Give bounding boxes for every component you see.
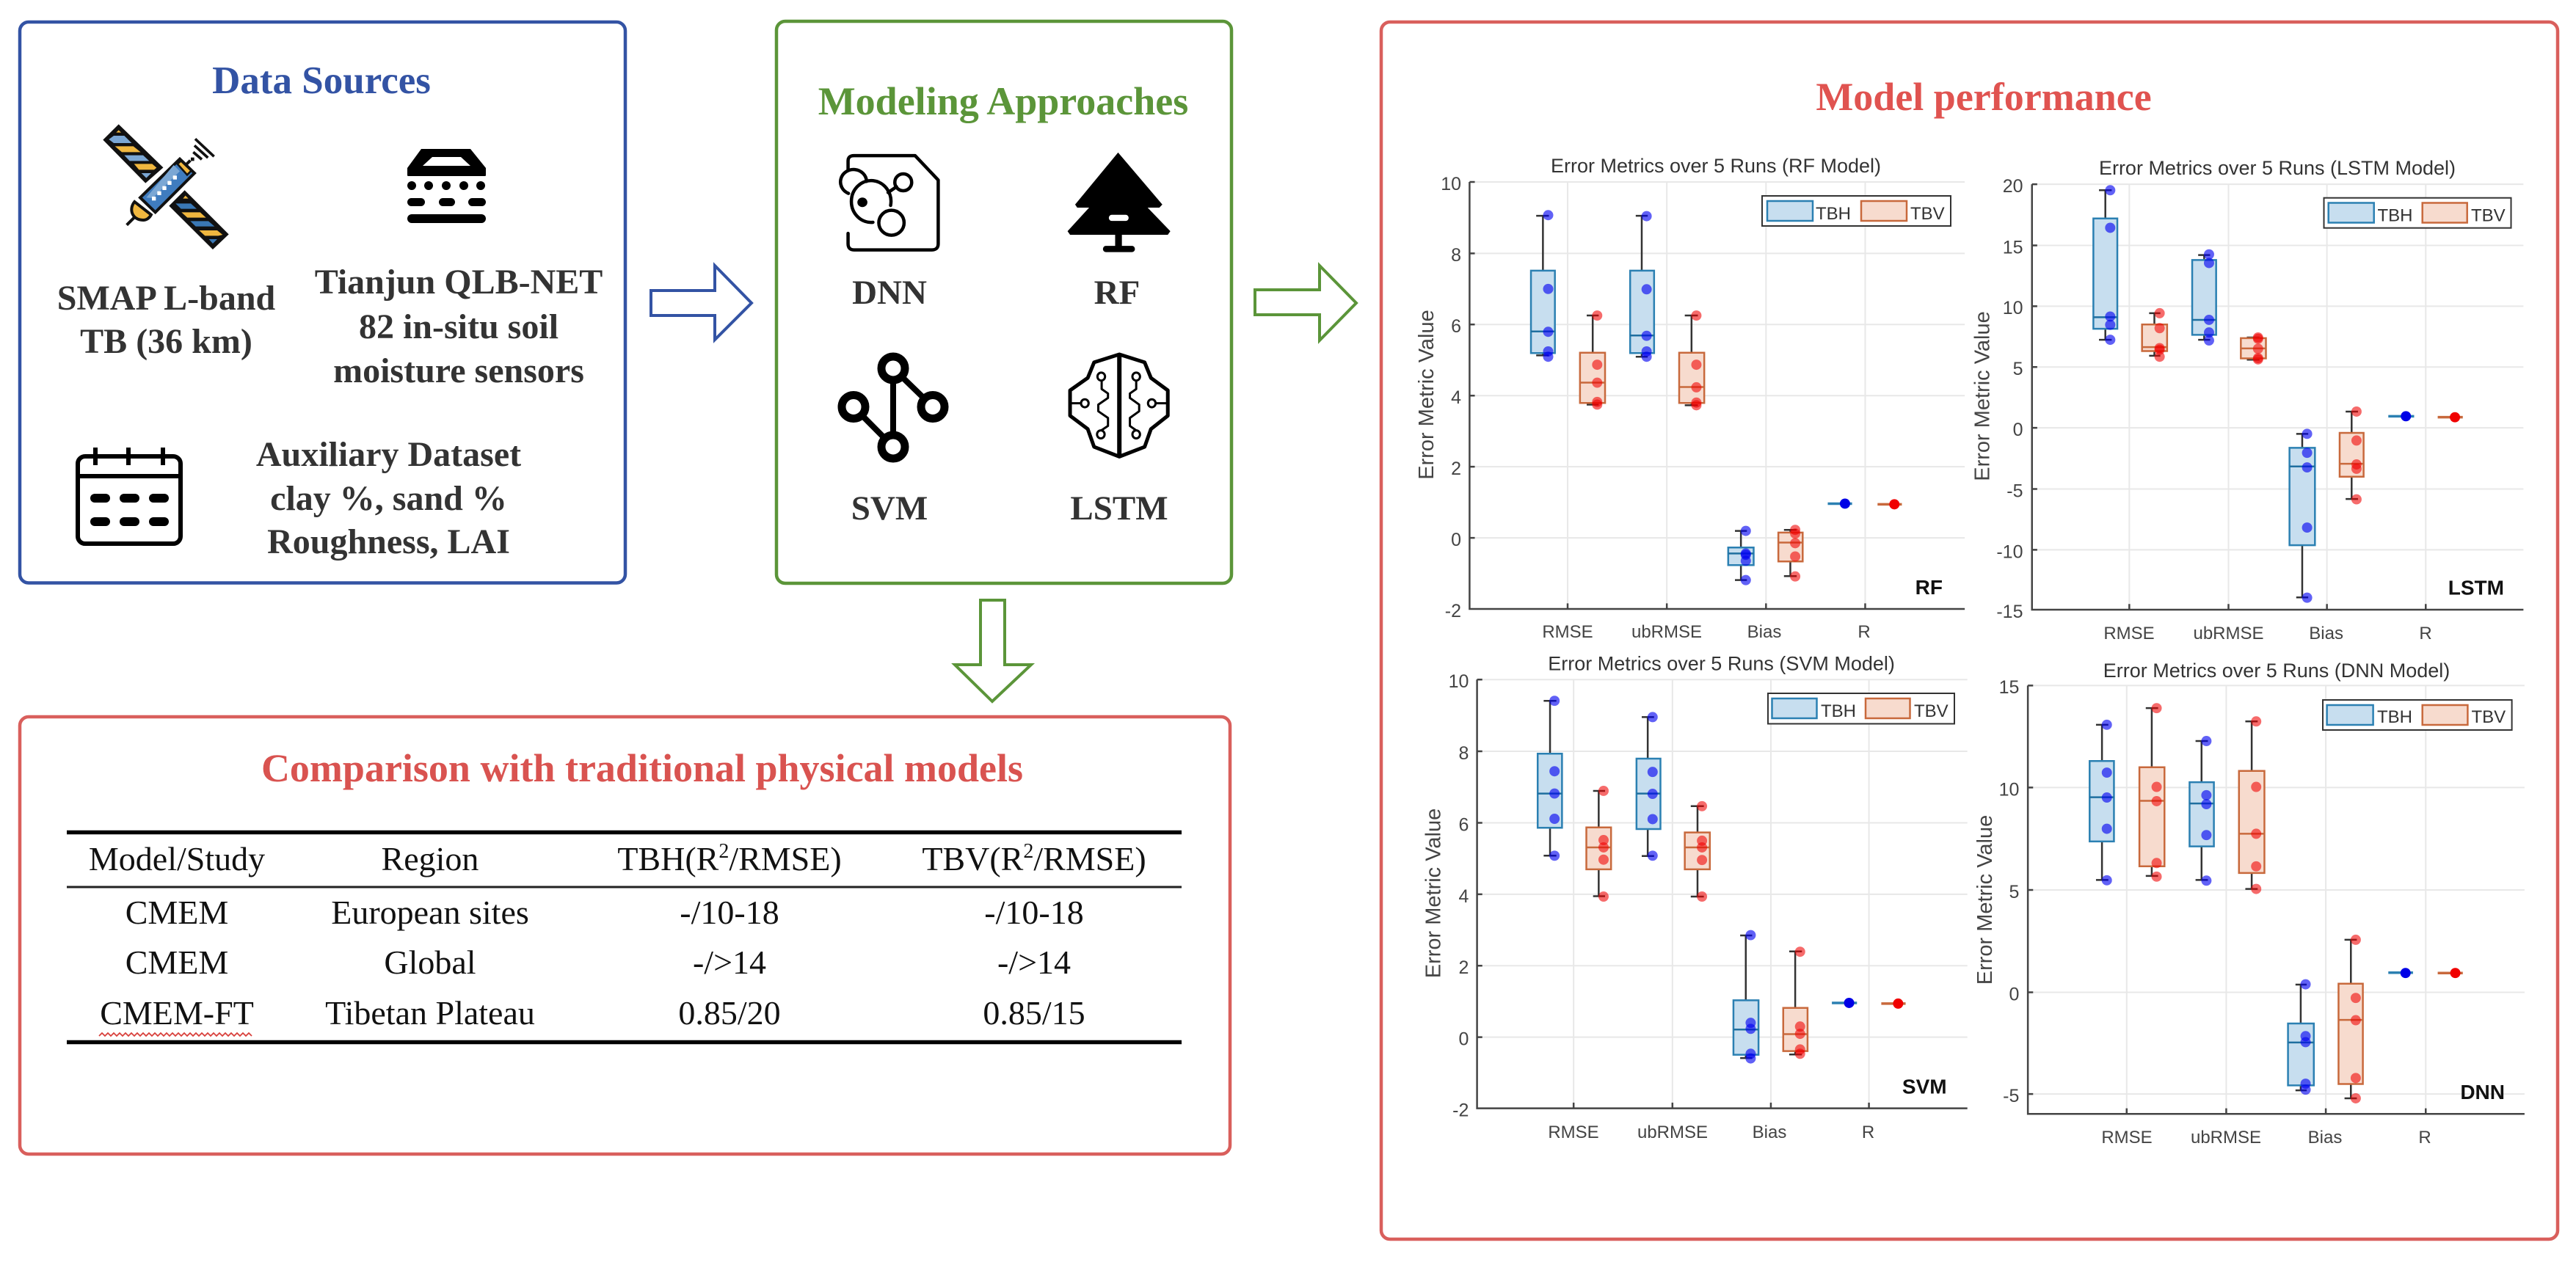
box: RMSE TBH — [1531, 210, 1555, 362]
y-axis tick labels: -15 — [1996, 602, 2023, 622]
y-axis tick labels: -2 — [1452, 1101, 1469, 1121]
legend — [2324, 198, 2511, 228]
y-axis tick labels: 0 — [1451, 530, 1461, 550]
y-axis tick labels: -5 — [2006, 481, 2023, 502]
box: Bias TBH — [2288, 979, 2314, 1095]
plot area: axes, grid and boxes — [2028, 685, 2525, 1114]
table header: 2 — [718, 840, 729, 863]
box: Bias TBV — [2338, 935, 2363, 1103]
table header: TBH(R — [617, 840, 718, 877]
chart: SVM model — [1422, 653, 1968, 1142]
y-axis tick labels: 2 — [1458, 957, 1469, 978]
icon: calendar — [78, 448, 181, 544]
box: RMSE TBV — [2142, 308, 2167, 362]
table row: CMEM European sites — [125, 894, 1084, 931]
plot area: axes, grid and boxes — [1469, 182, 1965, 609]
table row: CMEM-FT Tibetan Plateau: Tibetan Plateau — [325, 994, 535, 1032]
text: SMAP L-band: SMAP L-band — [57, 279, 276, 318]
x-axis category labels — [1542, 622, 1871, 642]
y-axis tick labels — [1449, 671, 1469, 1121]
table row: CMEM Global: Global — [384, 944, 476, 981]
text: SMAP L-band: TB (36 km) — [80, 322, 252, 361]
legend: TBH — [1816, 204, 1851, 224]
y-axis label: Error Metric Value — [1971, 311, 1995, 481]
legend — [2323, 700, 2512, 730]
table row: CMEM Global: CMEM — [125, 944, 228, 981]
table row: CMEM European sites: CMEM — [125, 894, 228, 931]
icon: satellite — [105, 126, 227, 248]
chart: RF model — [1415, 155, 1965, 642]
y-axis tick labels: 4 — [1458, 886, 1469, 907]
table row: CMEM European sites: European sites — [331, 894, 529, 931]
x-axis category labels: RMSE — [1548, 1123, 1599, 1142]
legend: TBV — [1910, 204, 1945, 224]
y-axis tick labels: 15 — [1999, 677, 2019, 698]
x-axis category labels: R — [2419, 624, 2432, 643]
y-axis tick labels — [1999, 677, 2019, 1106]
box: RMSE TBV — [2139, 703, 2164, 882]
x-axis category labels: Bias — [1747, 622, 1781, 642]
model tag: DNN: DNN — [2460, 1081, 2505, 1103]
model tag: LSTM: LSTM — [2448, 577, 2504, 599]
heading: data sources: Data Sources — [212, 59, 431, 102]
panel border — [20, 22, 625, 583]
legend: TBH — [1821, 701, 1856, 721]
box: ubRMSE TBH — [2189, 736, 2214, 886]
x-axis category labels: Bias — [2308, 1128, 2342, 1147]
text: SVM: SVM — [851, 489, 928, 528]
y-axis tick labels: 10 — [1999, 779, 2019, 800]
y-axis label: Error Metric Value — [1415, 310, 1438, 480]
box: Bias TBV — [1778, 525, 1802, 582]
box: R TBH — [2388, 968, 2413, 978]
table header: 2 — [1023, 840, 1033, 863]
plot area: axes, grid and boxes — [1477, 679, 1968, 1109]
y-axis tick labels: 0 — [1458, 1029, 1469, 1050]
box: RMSE TBH — [1538, 696, 1562, 861]
x-axis category labels: R — [2418, 1128, 2431, 1147]
x-axis category labels — [1548, 1123, 1874, 1142]
y-axis tick labels: 10 — [1441, 174, 1461, 194]
chart title: Error Metrics over 5 Runs (SVM Model) — [1548, 653, 1895, 675]
chart: DNN model — [1973, 660, 2525, 1147]
icon: DNN — [840, 156, 938, 250]
y-axis label: Error Metric Value — [1973, 815, 1997, 985]
table row: CMEM-FT Tibetan Plateau — [100, 994, 1085, 1032]
table header: /RMSE) — [1033, 840, 1146, 877]
y-axis tick labels — [1996, 176, 2023, 622]
text: DNN: DNN — [852, 274, 927, 312]
heading: model performance: Model performance — [1816, 75, 2152, 119]
chart title: Error Metrics over 5 Runs (RF Model) — [1551, 155, 1881, 177]
chart: LSTM model — [1971, 157, 2523, 643]
table row: CMEM Global: -/>14 — [693, 944, 766, 981]
arrow: data sources to modeling approaches — [651, 266, 752, 340]
x-axis category labels: ubRMSE — [1631, 622, 1702, 642]
y-axis tick labels: 5 — [2013, 359, 2023, 379]
table: comparison values — [67, 832, 1182, 1042]
box: R TBV — [2438, 968, 2463, 978]
table row: CMEM Global — [125, 944, 1071, 981]
legend: TBV — [1914, 701, 1949, 721]
x-axis category labels: RMSE — [2103, 624, 2155, 643]
panel: model performance — [1381, 22, 2558, 1239]
y-axis tick labels: 8 — [1451, 245, 1461, 266]
box: RMSE TBH — [2093, 185, 2117, 345]
heading: comparison: Comparison with traditional physical models — [261, 746, 1023, 790]
text: RF: RF — [1094, 274, 1140, 312]
legend — [1768, 693, 1954, 723]
icon: SVM graph — [842, 357, 945, 459]
table header: Model/Study — [89, 840, 265, 877]
box: RMSE TBV — [1580, 310, 1605, 409]
table row: CMEM European sites: -/10-18 — [984, 894, 1084, 931]
text: Tianjun QLB-NET: Tianjun QLB-NET — [315, 263, 603, 302]
y-axis tick labels: -10 — [1996, 541, 2023, 562]
panel border — [20, 717, 1230, 1154]
y-axis tick labels: 10 — [2003, 298, 2023, 318]
text: LSTM: LSTM — [1070, 489, 1168, 528]
box: Bias TBH — [1733, 930, 1758, 1064]
plot area: axes, grid and boxes — [2032, 184, 2523, 610]
box: R TBH — [1827, 498, 1852, 508]
y-axis tick labels: -2 — [1445, 601, 1461, 621]
x-axis category labels — [2101, 1128, 2431, 1147]
y-axis tick labels: 5 — [2009, 882, 2019, 902]
box: ubRMSE TBV — [1685, 801, 1710, 902]
box: RMSE TBH — [2089, 720, 2114, 886]
y-axis tick labels: -5 — [2003, 1086, 2019, 1106]
box: R TBH — [1832, 998, 1857, 1008]
box: ubRMSE TBV — [2241, 332, 2266, 365]
icon: RF tree — [1068, 153, 1171, 252]
legend: TBH — [2378, 205, 2413, 225]
text: Tianjun QLB-NET: moisture sensors — [333, 351, 584, 390]
box: R TBH — [2388, 411, 2414, 421]
y-axis tick labels: 8 — [1458, 743, 1469, 764]
table header: /RMSE) — [729, 840, 842, 877]
y-axis tick labels: 20 — [2003, 176, 2023, 197]
arrow: modeling approaches to comparison — [955, 600, 1031, 701]
box: RMSE TBV — [1587, 786, 1611, 902]
chart title: Error Metrics over 5 Runs (LSTM Model) — [2099, 157, 2456, 179]
table header: TBV(R — [922, 840, 1023, 877]
table row: CMEM Global: -/>14 — [997, 944, 1071, 981]
box: R TBV — [1881, 999, 1906, 1009]
y-axis tick labels: 0 — [2009, 985, 2019, 1005]
heading: modeling approaches: Modeling Approaches — [818, 79, 1188, 123]
chart title: Error Metrics over 5 Runs (DNN Model) — [2103, 660, 2450, 682]
box: ubRMSE TBH — [1630, 211, 1654, 362]
box: ubRMSE TBV — [2239, 716, 2264, 894]
x-axis category labels: ubRMSE — [2191, 1128, 2261, 1147]
table header — [89, 840, 1146, 877]
box: Bias TBH — [1728, 526, 1753, 585]
y-axis tick labels: 10 — [1449, 671, 1469, 692]
x-axis category labels: Bias — [1753, 1123, 1786, 1142]
box: ubRMSE TBV — [1679, 310, 1704, 410]
x-axis category labels: RMSE — [1542, 622, 1593, 642]
x-axis category labels: ubRMSE — [1637, 1123, 1708, 1142]
panel border — [1381, 22, 2558, 1239]
table row: CMEM European sites: -/10-18 — [680, 894, 779, 931]
model tag: SVM: SVM — [1902, 1076, 1947, 1098]
legend: TBV — [2472, 707, 2506, 727]
panel: comparison with traditional physical models — [20, 717, 1230, 1154]
panel: modeling approaches — [776, 21, 1231, 583]
table row: CMEM-FT Tibetan Plateau: 0.85/15 — [983, 994, 1085, 1032]
table row: CMEM-FT Tibetan Plateau: 0.85/20 — [678, 994, 781, 1032]
y-axis tick labels: 0 — [2013, 420, 2023, 440]
y-axis tick labels: 6 — [1458, 814, 1469, 835]
box: Bias TBV — [2340, 406, 2364, 505]
text: Tianjun QLB-NET: 82 in-situ soil — [359, 307, 559, 346]
icon: LSTM brain — [1070, 354, 1168, 456]
box: ubRMSE TBH — [2192, 249, 2216, 346]
legend: TBV — [2471, 205, 2506, 225]
box: Bias TBV — [1783, 946, 1808, 1059]
table row: CMEM-FT Tibetan Plateau: CMEM-FT — [100, 994, 254, 1032]
box: R TBV — [2438, 412, 2463, 423]
text: auxiliary dataset: Roughness, LAI — [267, 522, 510, 561]
y-axis tick labels — [1441, 174, 1461, 621]
y-axis tick labels: 2 — [1451, 459, 1461, 479]
x-axis category labels: R — [1858, 622, 1871, 642]
y-axis tick labels: 6 — [1451, 316, 1461, 337]
x-axis category labels: Bias — [2309, 624, 2343, 643]
box: Bias TBH — [2290, 428, 2315, 603]
box: ubRMSE TBH — [1637, 712, 1660, 861]
x-axis category labels: RMSE — [2101, 1128, 2153, 1147]
panel: data sources — [20, 22, 625, 583]
text: auxiliary dataset: clay %, sand % — [270, 479, 507, 518]
box: R TBV — [1877, 499, 1902, 509]
y-axis tick labels: 15 — [2003, 238, 2023, 258]
y-axis label: Error Metric Value — [1422, 809, 1446, 978]
x-axis category labels: ubRMSE — [2193, 624, 2264, 643]
panel border — [776, 21, 1231, 583]
y-axis tick labels: 4 — [1451, 387, 1461, 408]
legend — [1762, 196, 1951, 226]
model tag: RF: RF — [1915, 576, 1943, 599]
arrow: modeling approaches to model performance — [1255, 266, 1356, 340]
x-axis category labels — [2103, 624, 2432, 643]
table header: Region — [382, 840, 479, 877]
legend: TBH — [2377, 707, 2412, 727]
x-axis category labels: R — [1862, 1123, 1874, 1142]
icon: soil sensor layers — [407, 149, 486, 223]
text: auxiliary dataset: Auxiliary Dataset — [256, 435, 521, 474]
